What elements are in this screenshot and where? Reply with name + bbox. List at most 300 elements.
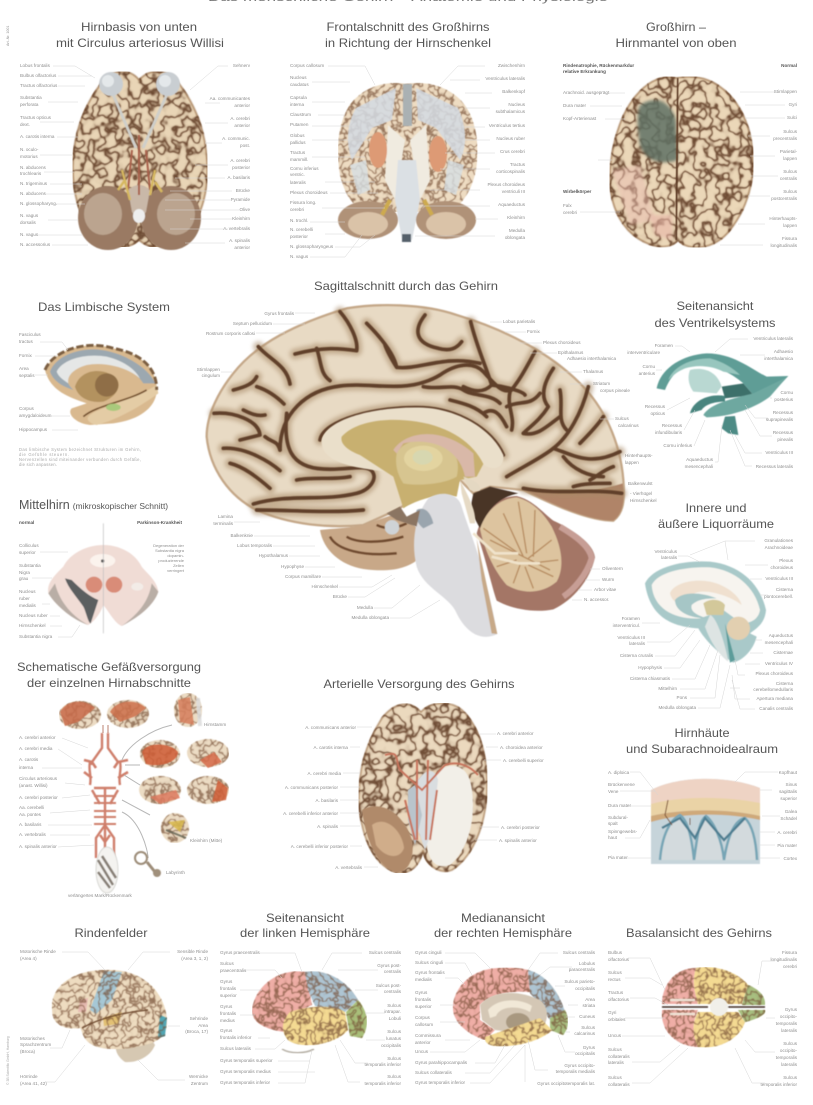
heading: Hirnbasis: Hirnbasis von unten	[81, 20, 197, 34]
panel: Ventrikelsystem	[627, 299, 794, 469]
labels: ventricles left: Cornu inferius	[663, 443, 693, 448]
labels: right hemisphere left: Uncus	[415, 1049, 429, 1054]
illustration: midbrain section	[48, 523, 158, 633]
panel: Hirnbasis von unten	[20, 20, 251, 250]
labels: basal left: olfactorius	[608, 997, 630, 1002]
illustration: arterial tree	[84, 733, 128, 858]
labels: Frontalschnitt right: ventriculi III	[502, 189, 525, 194]
labels: left hemisphere left: medius	[220, 1018, 236, 1023]
labels: Frontalschnitt right: Aquaeductus	[498, 202, 526, 207]
labels: right hemisphere left: Commissura	[415, 1033, 441, 1038]
labels: basal left	[608, 950, 688, 1087]
heading: Großhirn: Großhirn –	[646, 20, 706, 34]
labels: Großhirn left: Arachnoid. ausgeprägt	[563, 90, 610, 95]
labels: Frontalschnitt left: Tractus	[290, 150, 306, 155]
heading: Frontalschnitt: in Richtung der Hirnschenkel	[325, 36, 491, 50]
labels: arterial right: A. cerebri posterior	[501, 825, 540, 830]
illustration: sagittal brain section	[207, 305, 624, 637]
labels: right hemisphere left: Gyrus parahippocampalis	[415, 1060, 468, 1065]
labels: sagittal lower left: Lobus temporalis	[237, 543, 273, 548]
labels: sagittal lower right: Hinterhaupts-	[625, 453, 653, 458]
limbic explanatory note: die sich anpassen.	[19, 462, 57, 467]
labels: Großhirn right: Parietal-	[780, 149, 797, 154]
panel: Basalansicht	[608, 926, 798, 1087]
labels: midbrain right: produzierende	[158, 558, 185, 563]
labels: CSF right: Apertura mediana	[756, 696, 793, 701]
panel: Medianansicht rechte Hemisphäre	[415, 911, 596, 1086]
labels: meninges left: Dura mater	[608, 803, 631, 808]
labels: basal left: Bulbus	[608, 950, 623, 955]
labels: left hemisphere right: Sulcus	[387, 1074, 402, 1079]
labels: Frontalschnitt left: Putamen	[290, 122, 309, 127]
labels: sagittal lower right: lappen	[625, 460, 639, 465]
labels: sagittal lower right: N. accessor.	[584, 597, 609, 602]
labels: sagittal upper right: Sulcus	[615, 416, 629, 421]
labels: Großhirn right: postcentralis	[771, 196, 798, 201]
labels: Frontalschnitt left: N. trochl.	[290, 218, 308, 223]
labels: midbrain right: Parkinson-Krankheit	[137, 520, 182, 525]
labels: Rindenfelder: (Area 3, 1, 2)	[181, 956, 208, 961]
labels: arterial right: A. cerebri anterior	[497, 731, 534, 736]
labels: Großhirn left: Kopf-Arterienast	[563, 116, 597, 121]
panel: Limbisches System	[19, 300, 170, 467]
labels: Frontalschnitt left: mammill.	[290, 157, 308, 162]
illustration: brain base	[73, 72, 207, 250]
illustration: cerebrum from above	[610, 77, 753, 247]
labels: sagittal upper right: corpus pineale	[600, 388, 630, 393]
labels: arterial left: A. cerebelli inferior posterior	[291, 844, 348, 849]
labels: ventricles left: Recessus	[645, 404, 666, 409]
labels: Hirnbasis right: A. basilaris	[228, 175, 251, 180]
heading: Gefäßversorgung	[17, 660, 201, 690]
labels: Frontalschnitt right: oblongata	[505, 235, 525, 240]
labels: right hemisphere left: Gyrus frontalis	[415, 970, 445, 975]
heading: Liquorräume: Innere und	[686, 501, 746, 515]
labels: midbrain left: Nucleus ruber	[19, 613, 48, 618]
heading: linke Hemisphäre	[240, 911, 370, 940]
labels: midbrain left: Substantia nigra	[19, 634, 53, 639]
labels: basal right: lateralis	[781, 1062, 798, 1067]
labels: Hirnbasis left: N. vagus	[20, 232, 39, 237]
labels: basal right	[735, 950, 798, 1087]
labels: basal left: olfactorius	[608, 957, 630, 962]
labels: CSF left: Ventriculus	[655, 549, 678, 554]
labels: sagittal lower right: Wurm	[602, 577, 614, 582]
labels: meninges left: spalt	[608, 821, 618, 826]
labels: left hemisphere left: Gyrus temporalis inferior	[220, 1080, 271, 1085]
labels: meninges right: Sinus	[786, 782, 798, 787]
labels: left hemisphere right: Sulcus	[387, 1003, 402, 1008]
heading: Rindenfelder: Rindenfelder	[74, 926, 148, 940]
labels: vascular left: interna	[19, 765, 33, 770]
labels: meninges right: Pia mater	[777, 843, 797, 848]
labels: sagittal upper right: Fornix	[527, 329, 540, 334]
labels: Frontalschnitt right: Medulla	[509, 228, 525, 233]
panel: Sagittalschnitt	[197, 279, 657, 637]
labels: sagittal lower left: Medulla oblongata	[351, 615, 389, 620]
limbic explanatory note: Das limbische System bezeichnet Strukturen im Gehirn,	[19, 447, 141, 452]
heading: rechte Hemisphäre	[434, 911, 572, 940]
labels: Hirnbasis left: Lobus frontalis	[20, 63, 51, 68]
heading: Sagittalschnitt: Sagittalschnitt durch das Gehirn	[314, 279, 498, 293]
labels: CSF right: cerebellomedullaris	[753, 687, 794, 692]
labels: CSF right: Cisternae	[773, 650, 793, 655]
labels: right hemisphere left: Gyrus temporalis inferior	[415, 1080, 466, 1085]
limbic explanatory note: Nervenzellen sind miteinander verbunden durch Gefäße,	[19, 457, 141, 462]
labels: Hirnbasis left: perforata	[20, 102, 39, 107]
panel: Arterielle Versorgung	[283, 677, 544, 873]
labels: Großhirn left: Dura mater	[563, 103, 586, 108]
labels: sagittal upper right: Thalamus	[583, 369, 604, 374]
labels: Großhirn right	[720, 63, 798, 248]
illustration: meninges block	[651, 779, 760, 864]
labels: Hirnbasis right: Aa. communicantes	[210, 96, 251, 101]
labels: meninges left: Pia mater	[608, 855, 628, 860]
labels: Hirnbasis left: Substantia	[20, 95, 42, 100]
labels: ventricles left: Cornu	[642, 364, 655, 369]
labels: Frontalschnitt left: Capsula	[290, 95, 307, 100]
labels: right hemisphere left: frontalis	[415, 997, 432, 1002]
labels: meninges right: A. cerebri	[777, 830, 797, 835]
labels: Frontalschnitt right: Kleinhirn	[507, 215, 525, 220]
labels: left hemisphere left: frontalis	[220, 986, 237, 991]
labels: sagittal lower right: Hirnschenkel	[630, 498, 657, 503]
labels: basal left: rectus	[608, 977, 621, 982]
labels: left hemisphere left: Sulcus lateralis	[220, 1046, 252, 1051]
labels: Frontalschnitt left: lateralis	[290, 180, 307, 185]
temporal folds	[330, 523, 407, 554]
illustration: right hemisphere	[453, 968, 568, 1046]
labels: ventricles right: suprapinealis	[766, 417, 794, 422]
labels: Frontalschnitt right: Ventriculus lateralis	[485, 76, 526, 81]
labels: CSF left: Foramen	[622, 616, 640, 621]
labels: ventricles right: Recessus lateralis	[756, 464, 794, 469]
labels: vascular left: Circulus arteriosus	[19, 776, 58, 781]
labels: Hirnbasis right: posterior	[232, 165, 250, 170]
heading: Hirnhäute: und Subarachnoidealraum	[626, 742, 778, 756]
labels: sagittal lower left: Medulla	[357, 605, 373, 610]
heading: Frontalschnitt	[325, 20, 491, 50]
labels: Hirnbasis right: Pyramide	[231, 197, 250, 202]
labels: right hemisphere left: callosum	[415, 1022, 433, 1027]
labels: left hemisphere left	[220, 950, 315, 1085]
labels: right hemisphere left: medialis	[415, 977, 433, 982]
labels: basal left: Sulcus	[608, 970, 622, 975]
labels: Großhirn left	[563, 63, 634, 215]
labels: sagittal lower left: Balkenknie	[231, 533, 253, 538]
heading: Mittelhirn: Mittelhirn (mikroskopischer Schnitt)	[19, 498, 168, 512]
labels: left hemisphere right: Sulcus	[387, 1056, 402, 1061]
labels: vascular right: Hirnstamm	[204, 722, 226, 727]
labels: Frontalschnitt right: Nucleus	[508, 102, 526, 107]
labels: Frontalschnitt left: ventric.	[290, 172, 305, 177]
heading: Limbisches System: Das Limbische System	[38, 300, 170, 314]
labels: vascular left: A. basilaris	[19, 822, 42, 827]
panel: Hirnhäute	[608, 726, 798, 864]
labels: limbic system: Corpus	[19, 406, 35, 411]
labels: ventricles left: infundibularis	[655, 430, 683, 435]
labels: Rindenfelder: Motorische Rinde	[20, 949, 56, 954]
labels: left hemisphere left: frontalis	[220, 1011, 237, 1016]
labels: CSF left: Medulla oblongata	[658, 705, 696, 710]
labels: basal left: Gyri	[608, 1010, 616, 1015]
labels: basal left: Sulcus	[608, 1075, 622, 1080]
labels: Großhirn left: Rindenatrophie, Rückenmarkdur	[563, 63, 634, 68]
labels: left hemisphere right	[322, 950, 402, 1086]
labels: Frontalschnitt right: Tractus	[510, 162, 526, 167]
labels: Großhirn right: Stirnlappen	[774, 89, 797, 94]
heading: rechte Hemisphäre: der rechten Hemisphäre	[434, 926, 572, 940]
labels: Hirnbasis left: N. abducens	[20, 165, 46, 170]
labels: arterial left: A. communicans anterior	[305, 725, 356, 730]
labels: Hirnbasis left: N. glossopharyng.	[20, 201, 57, 206]
labels: CSF left: lateralis	[629, 641, 646, 646]
labels: Frontalschnitt right	[415, 63, 526, 240]
labels: Hirnbasis right: A. communic.	[222, 136, 250, 141]
labels: Rindenfelder: (Broca)	[20, 1049, 36, 1054]
labels: Hirnbasis right: A. cerebri	[230, 116, 250, 121]
sulci	[214, 312, 622, 511]
panel: Liquorräume	[613, 501, 794, 711]
heading: Ventrikelsystem: Seitenansicht	[676, 299, 754, 313]
labels: Hirnbasis left: dorsalis	[20, 220, 37, 225]
labels: basal right: Sulcus	[783, 1075, 798, 1080]
labels: left hemisphere left: Gyrus	[220, 979, 233, 984]
labels: midbrain left: grau	[19, 576, 29, 581]
labels: midbrain right: verringert	[167, 568, 185, 573]
labels: Großhirn left: relative Erkrankung	[563, 69, 606, 74]
illustration: spine and labyrinth	[96, 847, 161, 893]
labels: sagittal upper left: cingulum	[202, 373, 220, 378]
labels: midbrain left: Hirnschenkel	[19, 623, 46, 628]
labels: vascular left: Aa. cerebelli	[19, 805, 44, 810]
small vertical print note top left: Art.-Nr. 1001	[6, 26, 10, 46]
labels: Rindenfelder: Zentrum	[191, 1081, 208, 1086]
heading: linke Hemisphäre: Seitenansicht	[266, 911, 345, 925]
labels: meninges right: Schädel	[780, 816, 797, 821]
labels: meninges right: Cortex	[783, 856, 798, 861]
labels: Hirnbasis right: Brücke	[236, 188, 250, 193]
labels: ventricles left	[627, 343, 722, 469]
arc: cerebellum outline	[282, 1049, 314, 1053]
labels: sagittal upper left: Rostrum corporis callosi	[206, 331, 255, 336]
labels: vascular left: Aa. pontes	[19, 812, 42, 817]
labels: midbrain left: Nucleus	[19, 589, 36, 594]
illustration: limbic system	[45, 345, 158, 425]
labels: basal right: cerebri	[783, 964, 797, 969]
labels: midbrain right: dopamin-	[167, 553, 185, 558]
labels: limbic system: tractus	[19, 339, 33, 344]
illustration: cortical fields	[52, 970, 167, 1062]
labels: left hemisphere left: praecentralis	[220, 968, 247, 973]
gyri shading	[214, 312, 622, 511]
labels: CSF right: pontocerebell.	[764, 594, 793, 599]
labels: Hirnbasis left: Tractus olfactorius	[20, 83, 58, 88]
labels: Frontalschnitt left: Claustrum	[290, 112, 311, 117]
labels: Frontalschnitt left: Plexus choroideus	[290, 190, 328, 195]
heading: Gefäßversorgung: Schematische Gefäßversorgung	[17, 660, 201, 674]
labels: basal right: longitudinalis	[770, 957, 798, 962]
labels: vascular left: A. spinalis anterior	[19, 844, 57, 849]
labels: Großhirn right: Sulci	[787, 115, 797, 120]
panel: Großhirn von oben	[563, 20, 798, 248]
labels: right hemisphere left: Corpus	[415, 1015, 431, 1020]
labels: basal left: collateralis	[608, 1054, 630, 1059]
labels: left hemisphere right: temporalis inferior	[364, 1081, 401, 1086]
labels: Großhirn left: Falx	[563, 203, 572, 208]
corpus callosum	[322, 408, 503, 472]
labels: vascular right	[68, 722, 226, 898]
labels: limbic system: Hippocampus	[19, 427, 48, 432]
labels: left hemisphere right: Sulcus	[387, 1029, 402, 1034]
labels: meninges left: haut	[608, 835, 618, 840]
labels: Frontalschnitt left: Fissura long.	[290, 200, 316, 205]
labels: sagittal lower left: Hypophyse	[281, 564, 304, 569]
labels: sagittal lower left: Hypothalamus	[259, 553, 289, 558]
labels: Frontalschnitt left: cerebri	[290, 207, 304, 212]
labels: Hirnbasis right: post.	[240, 143, 250, 148]
labels: Großhirn right: Fissura	[782, 236, 797, 241]
labels: midbrain left: Substantia	[19, 563, 41, 568]
heading: Hirnbasis: mit Circulus arteriosus Willisi	[56, 36, 224, 50]
labels: CSF right: Ventriculus IV	[765, 661, 794, 666]
labels: Großhirn right: centralis	[780, 176, 798, 181]
labels: sagittal upper left: Gyrus frontalis	[264, 311, 295, 316]
labels: midbrain left	[19, 520, 80, 639]
labels: Großhirn right: precentralis	[773, 136, 798, 141]
labels: left hemisphere left: Gyrus praecentralis	[220, 950, 261, 955]
labels: CSF right: mesencephali	[765, 640, 793, 645]
labels: Großhirn right: Sulcus	[783, 129, 798, 134]
labels: sagittal lower right: Oliventern	[602, 566, 623, 571]
labels: ventricles right: posterius	[774, 397, 794, 402]
labels: ventricles left: mesencephali	[685, 464, 713, 469]
labels: Frontalschnitt left: Globus	[290, 133, 305, 138]
labels: midbrain right: Substantia nigra	[155, 548, 185, 553]
labels: sagittal upper left: Septum pellucidum	[233, 321, 272, 326]
labels: basal right: Fissura	[782, 950, 797, 955]
labels: sagittal upper right: calcarinus	[618, 423, 639, 428]
labels: Hirnbasis left: N. trigeminus	[20, 181, 48, 186]
labels: right hemisphere right: Gyrus occipito-	[564, 1063, 595, 1068]
labels: sagittal upper left: Stirnlappen	[197, 367, 220, 372]
labels: meninges right: sagittalis	[779, 789, 798, 794]
labels: left hemisphere right: occipitalis	[381, 1043, 402, 1048]
labels: right hemisphere right: Sulcus centralis	[563, 950, 596, 955]
labels: sagittal upper right: Epithalamus	[558, 350, 584, 355]
labels: left hemisphere left: Gyrus	[220, 1028, 233, 1033]
labels: midbrain left: normal	[19, 520, 34, 525]
labels: right hemisphere left: Gyrus	[415, 990, 428, 995]
labels: ventricles right: pinealis	[777, 437, 794, 442]
labels: limbic system: Area	[19, 366, 29, 371]
panel: Seitenansicht linke Hemisphäre	[220, 911, 402, 1086]
panel: Frontalschnitt	[290, 20, 526, 259]
labels: left hemisphere right: Sulcus centralis	[369, 950, 402, 955]
labels: midbrain right	[137, 520, 185, 573]
heading: Liquorräume: äußere Liquorräume	[658, 517, 774, 531]
labels: right hemisphere right	[525, 950, 596, 1086]
labels: CSF left: Ventriculus III	[617, 635, 645, 640]
labels: left hemisphere right: centralis	[384, 989, 402, 994]
labels: CSF right: Ventriculus III	[765, 576, 793, 581]
labels: midbrain left: medialis	[19, 603, 37, 608]
labels: CSF left: Cisterna cruralis	[620, 653, 654, 658]
labels: arterial left: A. basilaris	[316, 798, 339, 803]
labels: ventricles right: Ventriculus lateralis	[753, 336, 794, 341]
heading: Basalansicht: Basalansicht des Gehirns	[626, 926, 772, 940]
labels: midbrain left: Nigra	[19, 570, 30, 575]
labels: basal left: Sulcus	[608, 1047, 622, 1052]
panel: Rindenfelder	[20, 926, 208, 1086]
labels: Frontalschnitt left: N. cerebelli	[290, 227, 313, 232]
labels: Hirnbasis left: N. vagus	[20, 213, 39, 218]
labels: CSF right: Cisterna	[776, 681, 793, 686]
labels: arterial left: A. cerebelli inferior anterior	[283, 811, 338, 816]
labels: CSF right: Granulationes	[764, 538, 794, 543]
labels: CSF left: Cisterna chiasmatis	[630, 676, 671, 681]
cerebrum base	[207, 305, 624, 570]
labels: Großhirn left: cerebri	[563, 210, 577, 215]
labels: ventricles left: interventriculare	[627, 350, 660, 355]
labels: ventricles left: Recessus	[662, 423, 683, 428]
labels: sagittal upper right: Lobus parietalis	[503, 319, 536, 324]
labels: Frontalschnitt left: N. glossopharyngeus	[290, 244, 334, 249]
labels: Hirnbasis left: dext.	[20, 122, 30, 127]
labels: left hemisphere right: temporalis inferior	[364, 1062, 401, 1067]
labels: Hirnbasis left: Tractus opticus	[20, 115, 52, 120]
labels: left hemisphere right: Sulcus post-	[376, 983, 401, 988]
labels: Frontalschnitt left: Corpus callosum	[290, 63, 324, 68]
labels: meninges right: Galea	[785, 809, 797, 814]
labels: Frontalschnitt right: Ventriculus tertius	[489, 123, 526, 128]
labels: arterial left: A. cerebri media	[308, 771, 341, 776]
labels: CSF left: Mittelhirn	[658, 686, 677, 691]
labels: meninges left: Vene	[608, 789, 619, 794]
labels: right hemisphere right: Gyrus	[583, 1045, 596, 1050]
labels: sagittal lower right: Arbor vitae	[594, 587, 617, 592]
labels: right hemisphere right: Sulcus	[581, 1025, 596, 1030]
labels: Hirnbasis right: Sehnerv	[233, 63, 251, 68]
labels: Frontalschnitt right: Nucleus ruber	[496, 136, 525, 141]
labels: sagittal upper right: Adhaesio interthalamica	[567, 356, 616, 361]
labels: sagittal lower left: Brücke	[333, 594, 347, 599]
labels: Hirnbasis right: Olive	[240, 207, 250, 212]
labels: CSF left: Hypophysis	[638, 665, 663, 670]
labels: meninges left: A. diploica	[608, 770, 630, 775]
illustration: arterial base of brain	[359, 703, 487, 873]
labels: sagittal upper right: Plexus choroideus	[543, 340, 581, 345]
labels: basal left: collateralis	[608, 1082, 630, 1087]
heading: Ventrikelsystem: des Ventrikelsystems	[654, 316, 776, 330]
labels: basal right: occipito-	[780, 1048, 797, 1053]
labels: left hemisphere right: Lobuli	[389, 1016, 401, 1021]
labels: arterial left	[283, 725, 378, 870]
labels: sagittal lower right: Balkenwulst	[628, 481, 653, 486]
labels: basal right: temporalis	[776, 1055, 798, 1060]
labels: Großhirn right: Sulcus	[783, 189, 798, 194]
labels: Hirnbasis left	[20, 63, 95, 247]
labels: CSF right: Arachnoideae	[765, 545, 793, 550]
labels: Frontalschnitt left: pallidus	[290, 140, 306, 145]
labels: left hemisphere right: lunatus	[386, 1036, 402, 1041]
illustration: CSF spaces	[645, 561, 766, 663]
brainstem	[385, 480, 497, 637]
labels: ventricles right: Recessus	[773, 430, 794, 435]
labels: Hirnbasis left: motorius	[20, 154, 38, 159]
illustration: small supplied brains	[59, 693, 229, 843]
labels: Großhirn right: Sulcus	[783, 169, 798, 174]
